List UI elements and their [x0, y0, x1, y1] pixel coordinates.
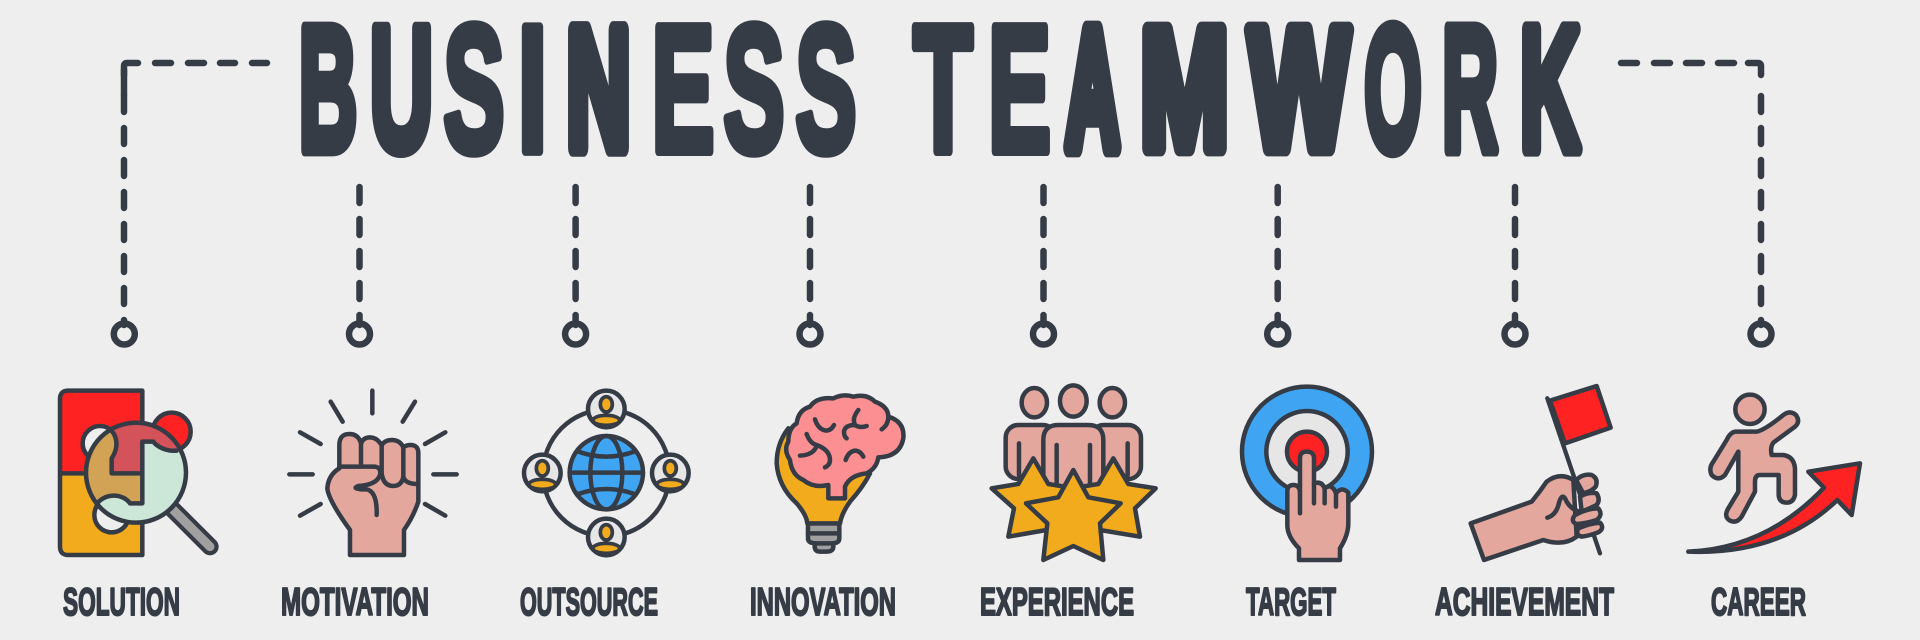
- connector: achievement: [1504, 187, 1526, 344]
- title: [299, 0, 1580, 190]
- icon: motivation fist: [289, 391, 457, 555]
- label: achievement: ACHIEVEMENT: [1435, 581, 1614, 624]
- icon: target with pointing hand: [1242, 387, 1372, 560]
- icon: outsource globe network: [524, 391, 689, 555]
- icon: career climbing person and arrow: [1688, 395, 1860, 552]
- icon: achievement hand with flag: [1471, 386, 1611, 560]
- label: solution: SOLUTION: [63, 581, 180, 624]
- label: motivation: MOTIVATION: [281, 581, 429, 624]
- label: innovation: INNOVATION: [750, 581, 896, 624]
- label: outsource: OUTSOURCE: [520, 581, 658, 624]
- connector: innovation: [800, 187, 820, 344]
- connector: experience: [1033, 187, 1054, 344]
- connector: career: [1621, 63, 1772, 344]
- connector: motivation: [349, 187, 370, 344]
- label: experience: EXPERIENCE: [980, 581, 1134, 624]
- icon: experience team and stars: [992, 385, 1156, 560]
- connector: outsource: [565, 187, 586, 344]
- label: target: TARGET: [1246, 581, 1336, 624]
- icon: innovation brain bulb: [777, 395, 903, 552]
- icon: solution puzzle and magnifier: [60, 391, 210, 555]
- label: career: CAREER: [1711, 581, 1806, 624]
- connector: solution: [114, 63, 267, 344]
- connector: target: [1267, 187, 1288, 344]
